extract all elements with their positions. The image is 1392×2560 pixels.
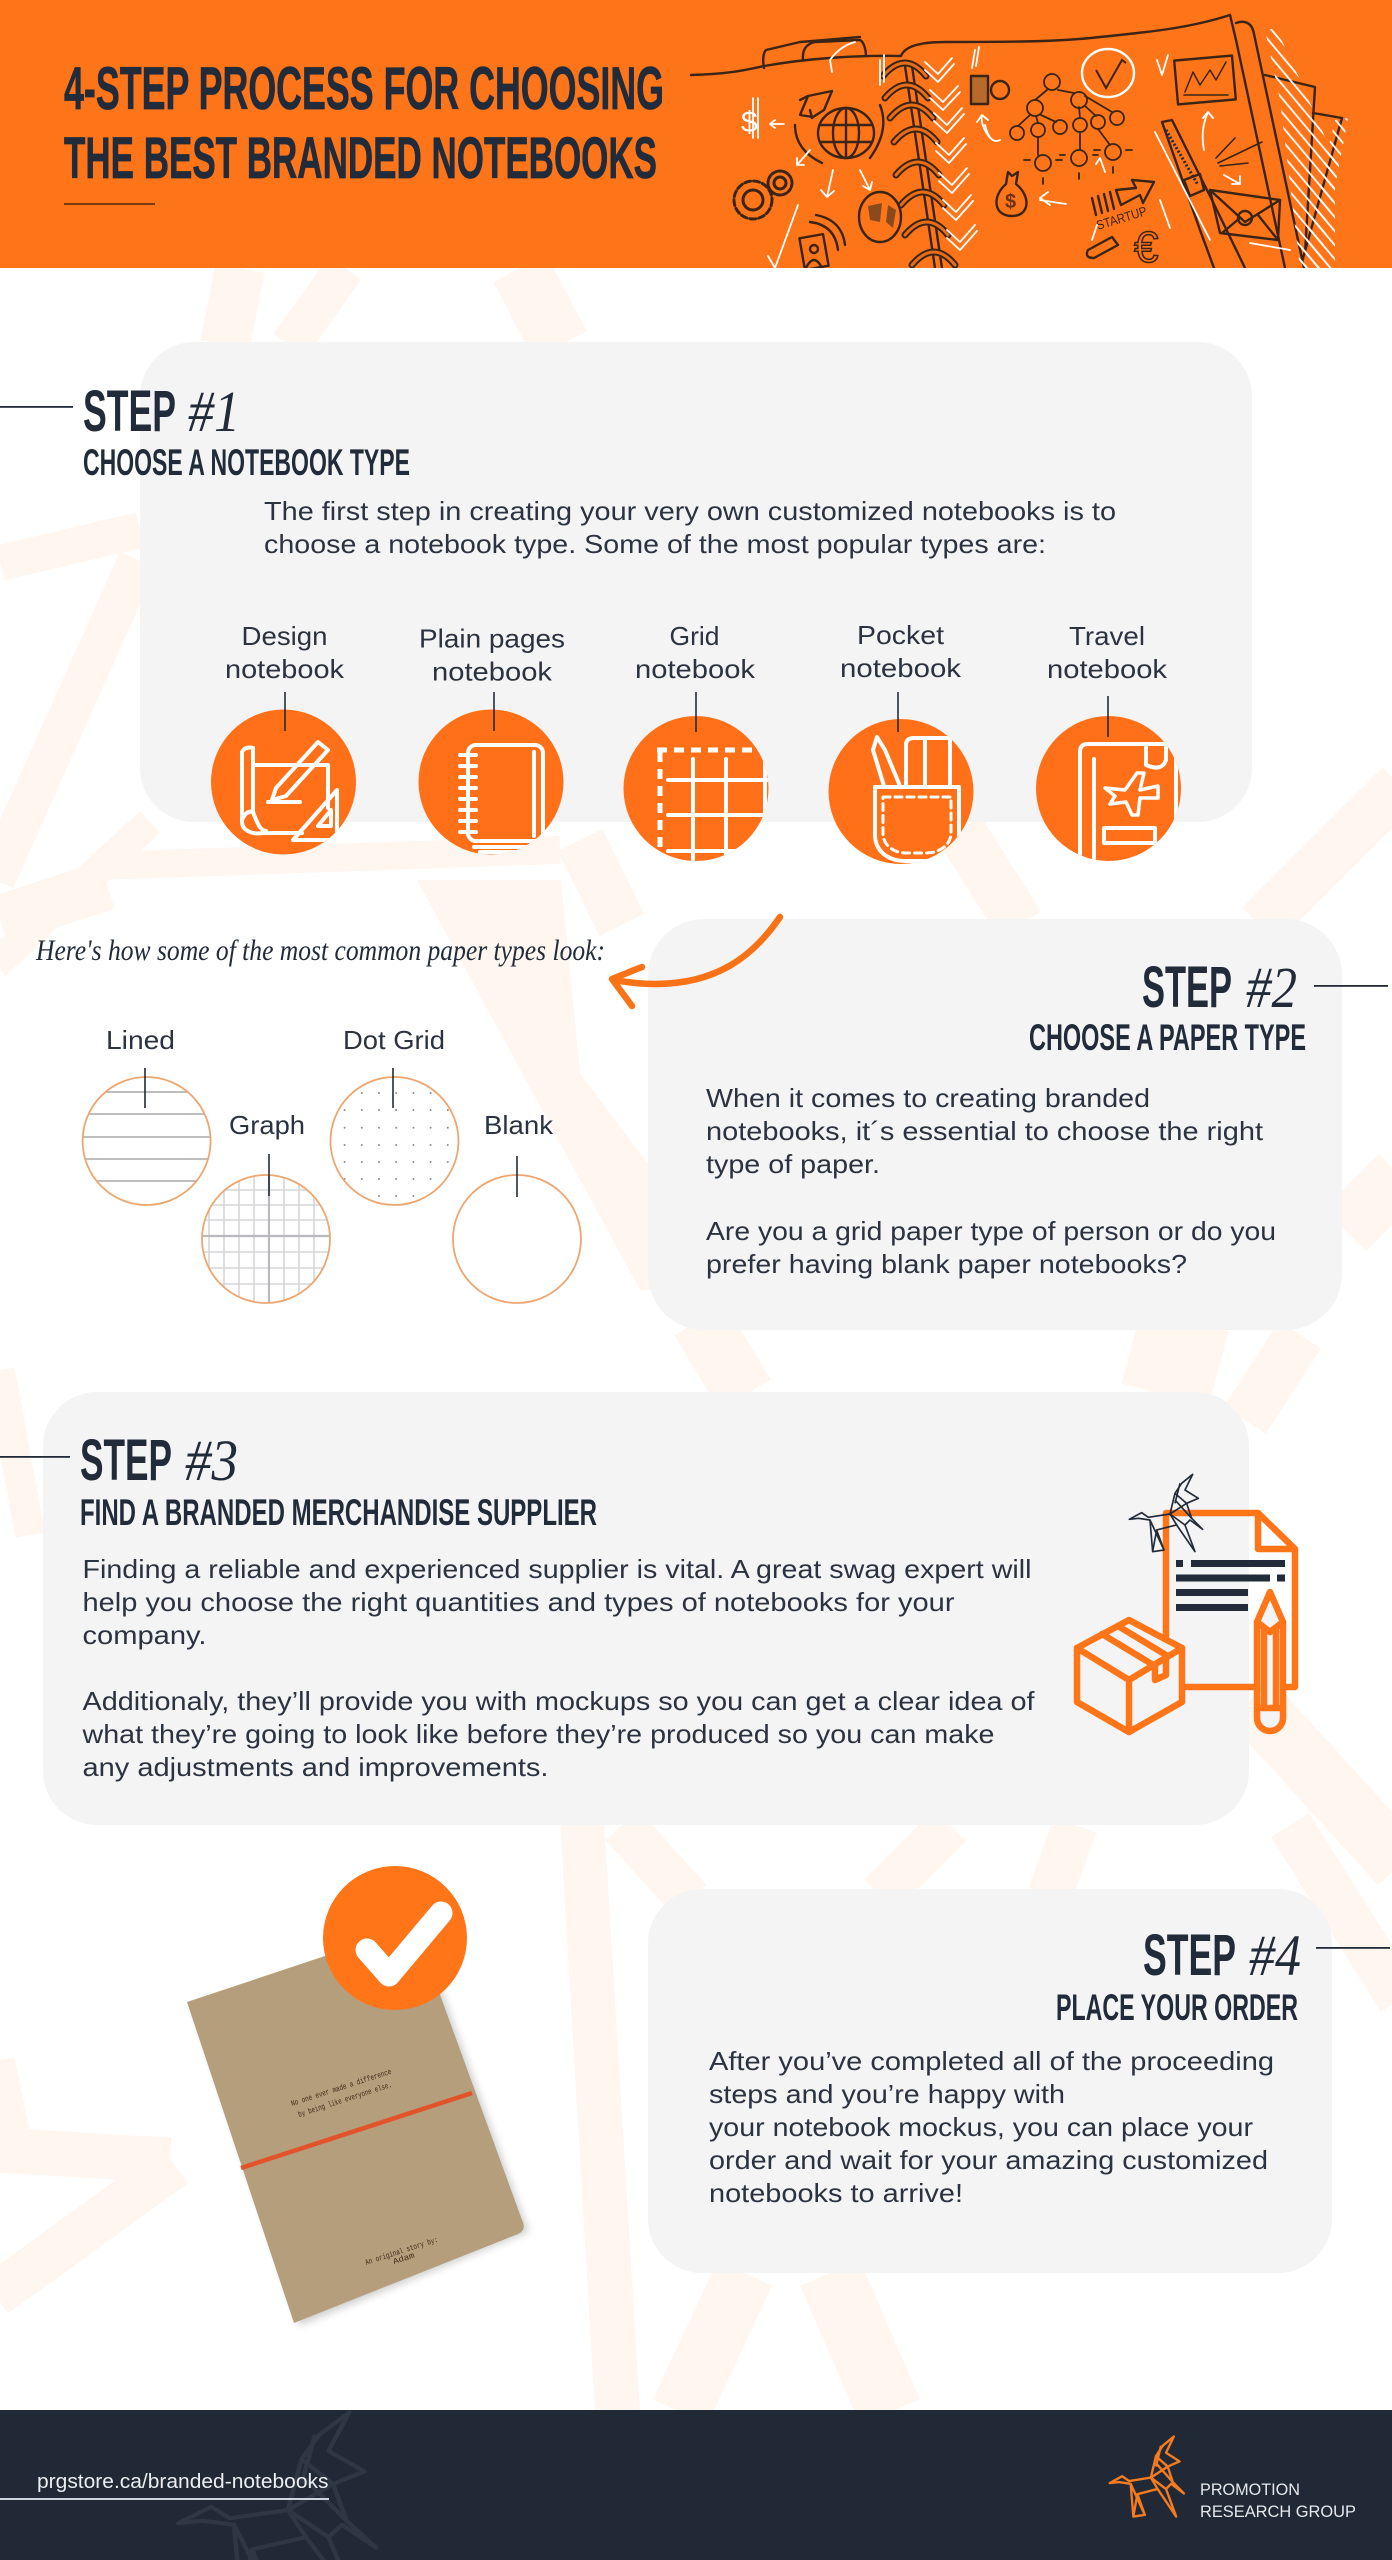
notebook type: design: notebook [225, 654, 345, 684]
money bag: $ [1005, 191, 1016, 213]
footer logo [1110, 2437, 1356, 2521]
notebook type: grid [624, 621, 772, 865]
step 2 body text: When it comes to creating branded [706, 1083, 1150, 1113]
notebook type: grid: Grid [670, 621, 720, 651]
step 3 heading: STEP [80, 1428, 172, 1493]
notebook cover outline [691, 15, 1342, 268]
cover author [364, 2236, 439, 2268]
background pattern: vertical strip [560, 1820, 640, 2412]
cover author: An original story by: [364, 2236, 439, 2268]
background pattern: large diagonal panel [417, 880, 660, 1290]
step 2 body text: Are you a grid paper type of person or do you [706, 1216, 1276, 1246]
notebook type: design [211, 621, 356, 854]
notebook type: pocket [828, 620, 974, 864]
step 2 heading: #2 [1246, 955, 1297, 1020]
title: 4-STEP PROCESS FOR CHOOSING [64, 55, 664, 122]
notebook type: design: Design [242, 621, 328, 651]
title: THE BEST BRANDED NOTEBOOKS [64, 126, 657, 191]
notebook type: plain pages: notebook [432, 656, 553, 686]
white arrows on the right page [985, 55, 1290, 250]
money bag [996, 172, 1026, 216]
step 4 heading [1056, 1923, 1390, 2028]
icon: pocket with pencil and card [873, 737, 959, 861]
white arrows on the left page [768, 115, 990, 268]
step 3 body text: what they’re going to look like before they’re produced so you can make [81, 1719, 994, 1749]
white check circle [1082, 49, 1134, 97]
notebook type: plain pages [418, 624, 565, 854]
step 3 body text: Finding a reliable and experienced supplier is vital. A great swag expert will [82, 1554, 1032, 1584]
cover author: Adam [392, 2251, 416, 2267]
coin stack and coin [971, 76, 1009, 104]
step 4 heading: #4 [1249, 1923, 1301, 1988]
icon: travel book with plane [1080, 744, 1176, 860]
panel: step 3 card [43, 1392, 1249, 1825]
paper type: blank [453, 1110, 581, 1303]
document text lines [1176, 1560, 1285, 1611]
startup arrow: STARTUP [1094, 203, 1149, 233]
title underline [64, 203, 155, 205]
paper type: dot grid: Dot Grid [343, 1025, 445, 1055]
pen [1155, 120, 1245, 268]
paper type: blank: Blank [484, 1110, 554, 1140]
dollar sign: $ [741, 106, 758, 139]
notebook shadow [192, 1930, 529, 2326]
document [1166, 1513, 1295, 1687]
footer url: prgstore.ca/branded-notebooks [37, 2471, 328, 2493]
step 1 heading: #1 [188, 379, 240, 444]
pencil [1257, 1592, 1283, 1731]
footer [0, 2410, 1392, 2560]
step 4 body text: After you’ve completed all of the proceeding [709, 2046, 1274, 2076]
second globe [859, 192, 901, 242]
notebook type: pocket: Pocket [857, 620, 945, 650]
USB stick [1087, 237, 1118, 258]
step 3 body text: help you choose the right quantities and types of notebooks for your [82, 1587, 955, 1617]
footer logo: PROMOTION [1200, 2480, 1300, 2499]
spiral spine [883, 63, 955, 268]
step 1 heading: STEP [83, 379, 176, 444]
notebook type: pocket: notebook [840, 653, 962, 683]
cover quote [290, 2068, 393, 2120]
paper type: graph [200, 1110, 335, 1310]
handwritten note: Here's how some of the most common paper types look: [35, 934, 605, 967]
step 2 body text: prefer having blank paper notebooks? [706, 1249, 1187, 1279]
step 3 body text [81, 1554, 1035, 1782]
unicorn mark [1129, 1474, 1203, 1552]
step 1 body text: The first step in creating your very own customized notebooks is to [264, 496, 1116, 526]
footer logo: RESEARCH GROUP [1200, 2502, 1356, 2521]
icon: document, pencil and box [1077, 1474, 1295, 1732]
step 4 heading: STEP [1143, 1923, 1236, 1988]
rocket [800, 91, 832, 118]
icon: blueprint with pencil and ruler [242, 742, 337, 840]
photo frame with signal [799, 215, 845, 270]
cover quote: No one ever made a difference [290, 2068, 393, 2109]
arrow: from step 2 to paper types [612, 917, 780, 1006]
step 4 body text: notebooks to arrive! [709, 2178, 963, 2208]
panel: step 2 card [648, 919, 1342, 1330]
panel: step 4 card [648, 1889, 1332, 2273]
footer ghost unicorn [178, 2412, 376, 2560]
trend chart screen [1174, 56, 1236, 104]
step 4 body text: order and wait for your amazing customized [709, 2145, 1268, 2175]
paper type: graph: Graph [229, 1110, 305, 1140]
notebook type: travel: notebook [1047, 654, 1168, 684]
notebook type: travel [1036, 621, 1181, 861]
header illustration: hand-drawn notebook doodles [691, 15, 1348, 272]
step 2 body text [706, 1083, 1276, 1279]
paper type: dot grid [330, 1025, 460, 1205]
gears [734, 171, 792, 219]
notebook type: travel: Travel [1069, 621, 1145, 651]
startup arrow [1092, 180, 1154, 233]
box [1077, 1620, 1182, 1732]
euro symbol: € [1134, 223, 1158, 272]
icon: spiral notebook [460, 745, 543, 852]
step 3 heading: FIND A BRANDED MERCHANDISE SUPPLIER [80, 1492, 597, 1533]
step 2 body text: type of paper. [706, 1149, 880, 1179]
notebook cover [187, 1926, 524, 2323]
envelope [1210, 190, 1280, 240]
paper type: lined [80, 1025, 215, 1205]
dark growth arrows [1216, 138, 1262, 166]
step 1 heading: CHOOSE A NOTEBOOK TYPE [83, 442, 410, 483]
icon: grid page [657, 750, 772, 865]
dollar sign [741, 98, 784, 139]
notebook type: grid: notebook [635, 654, 756, 684]
step 3 heading: #3 [185, 1428, 238, 1493]
org chart people [1010, 74, 1132, 184]
header band [0, 0, 1392, 272]
step 1 body text [264, 496, 1116, 559]
step 2 heading [1029, 955, 1388, 1058]
step 4 body text: your notebook mockus, you can place your [709, 2112, 1253, 2142]
step 3 body text: company. [82, 1620, 206, 1650]
step 2 body text: notebooks, it´s essential to choose the right [706, 1116, 1264, 1146]
white chevrons beside spine [830, 42, 979, 250]
step 4 body text: steps and you’re happy with [709, 2079, 1065, 2109]
cover quote: by being like everyone else. [297, 2081, 393, 2120]
step 2 heading: STEP [1142, 955, 1232, 1020]
notebook type: plain pages: Plain pages [419, 624, 565, 654]
notebook photo with check badge [187, 1866, 529, 2326]
step 4 body text [709, 2046, 1274, 2208]
icon: check badge [323, 1866, 467, 2010]
step 3 body text: any adjustments and improvements. [82, 1752, 548, 1782]
globe [795, 105, 883, 163]
title [64, 55, 664, 191]
step 1 body text: choose a notebook type. Some of the most popular types are: [264, 529, 1046, 559]
step 3 body text: Additionaly, they’ll provide you with mockups so you can get a clear idea of [82, 1686, 1035, 1716]
step 3 heading [0, 1428, 597, 1533]
step 1 heading [0, 379, 410, 483]
red band [241, 2093, 472, 2168]
panel: step 1 card [140, 342, 1252, 822]
paper type: lined: Lined [106, 1025, 175, 1055]
white hatching on the page edges [1265, 28, 1335, 268]
